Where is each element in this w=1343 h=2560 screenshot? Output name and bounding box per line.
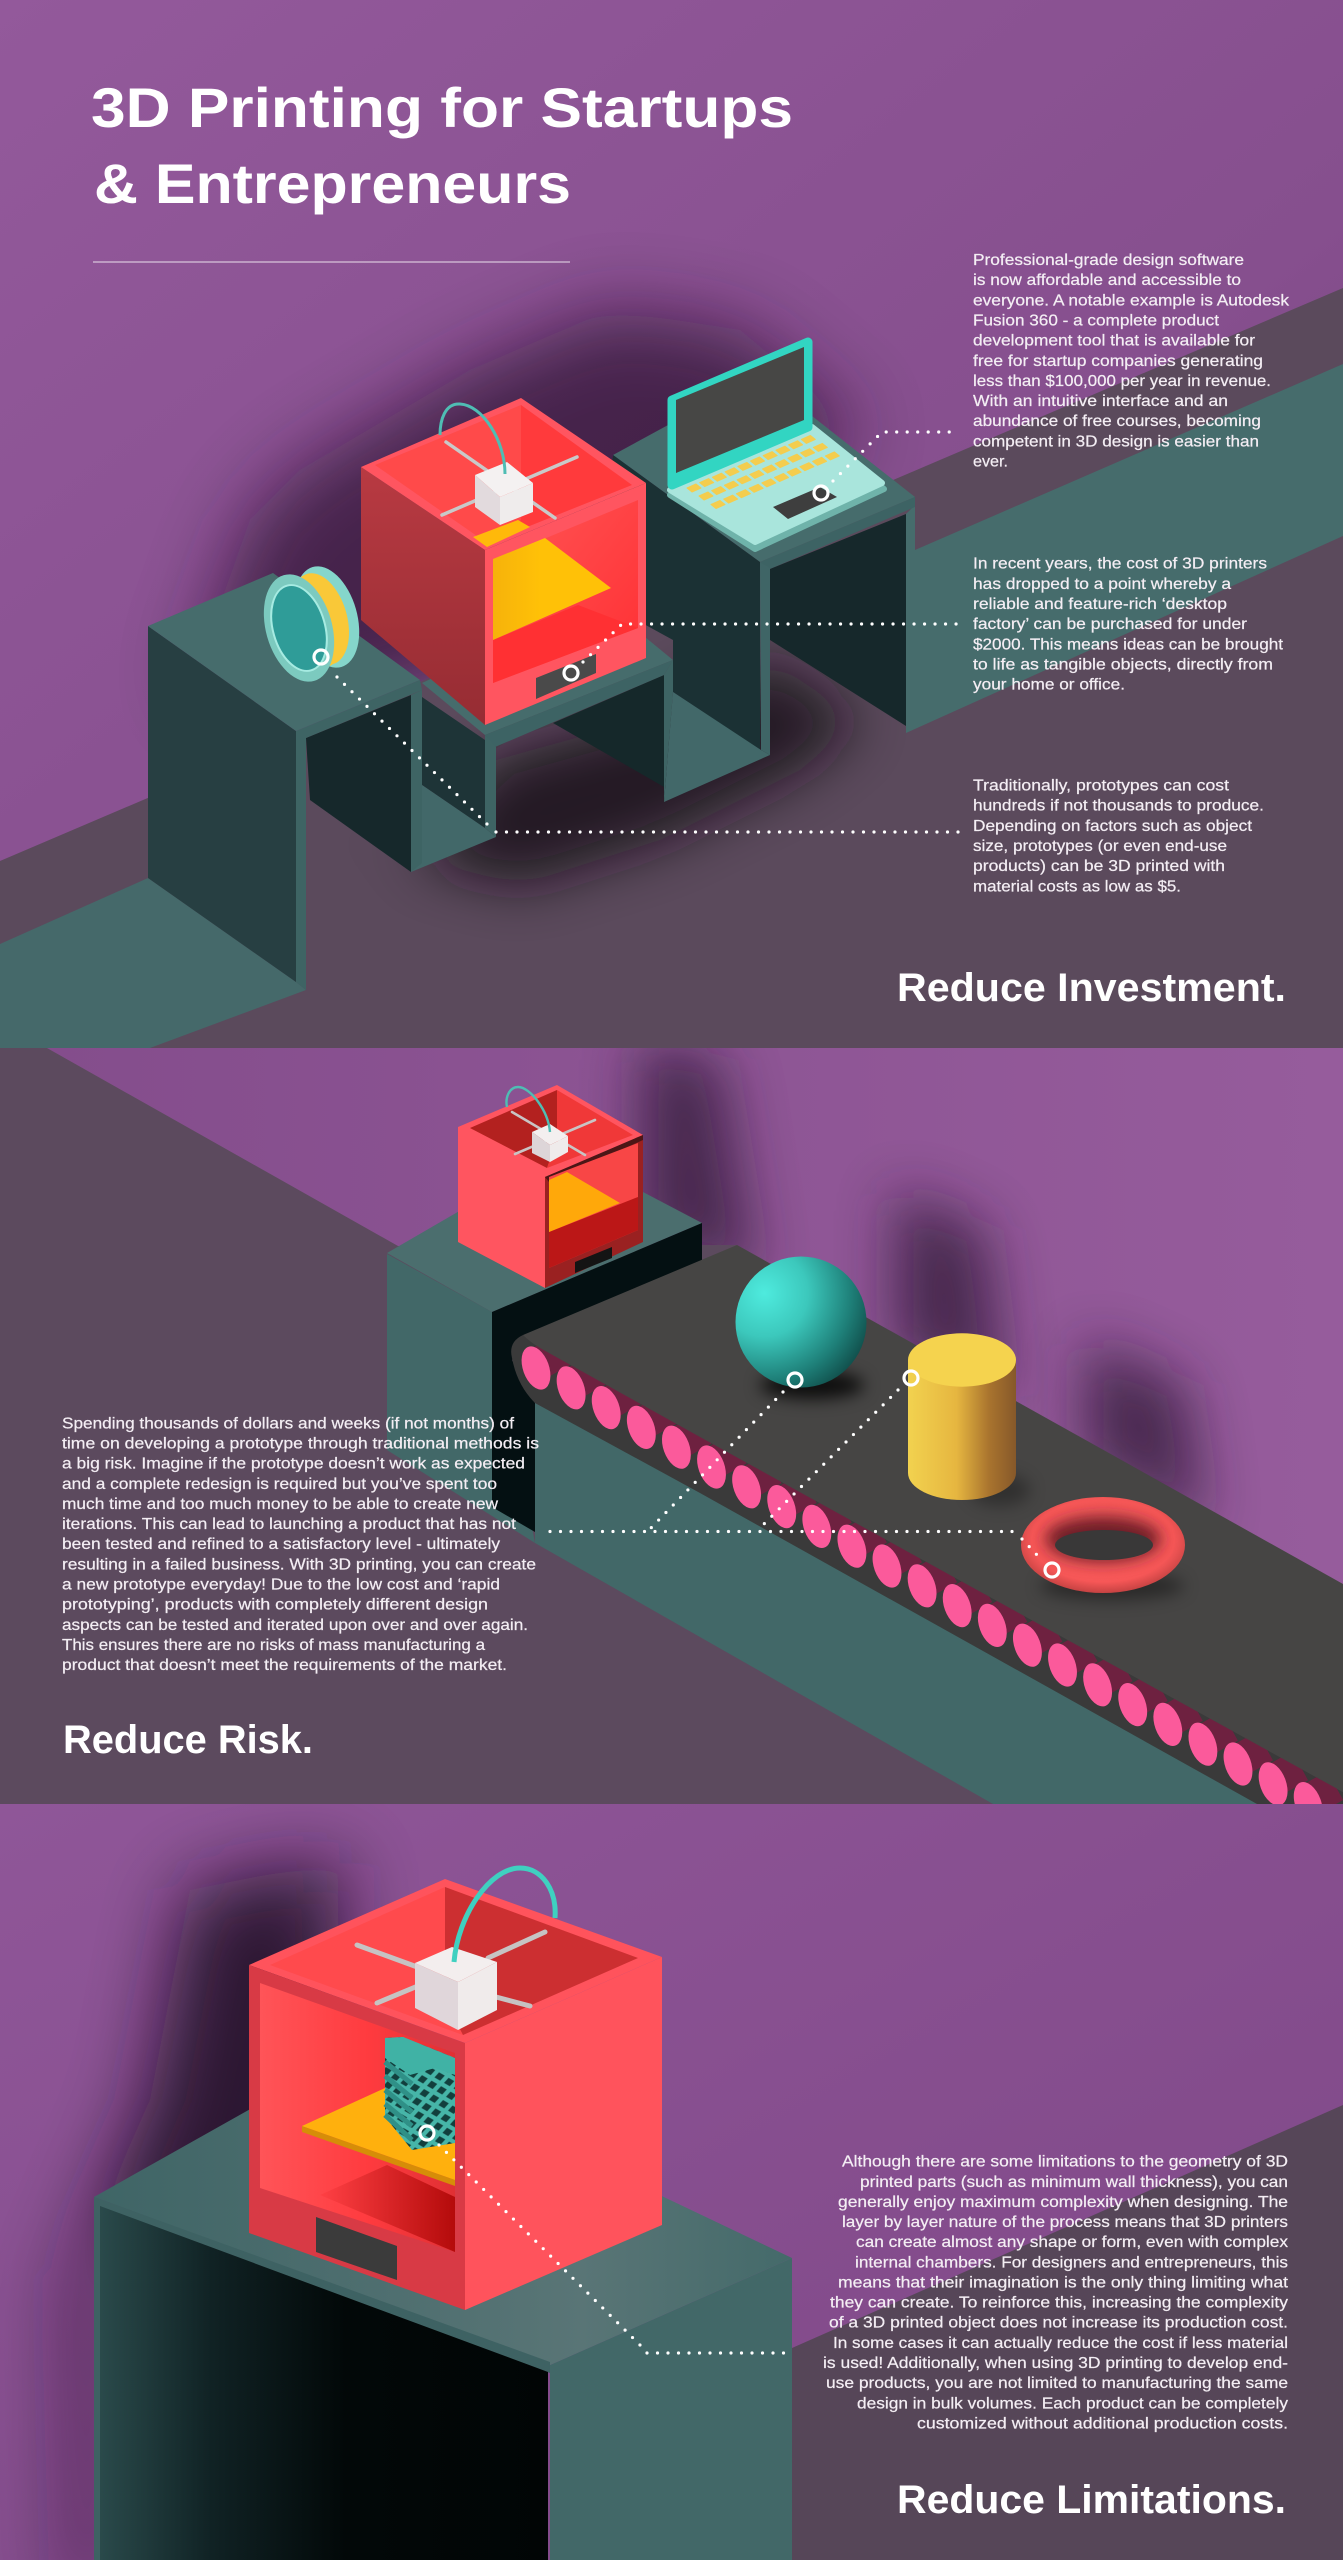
callout: cylinder	[757, 1390, 898, 1531]
filament	[506, 1087, 550, 1132]
text block: limitations: Although there are some limitations to the geometry of 3D	[842, 2154, 1288, 2171]
text block: design software: With an intuitive interface and an	[973, 393, 1228, 410]
left table side	[148, 626, 296, 982]
post one	[411, 690, 422, 872]
lattice left bands	[385, 2062, 412, 2140]
text block: risk: Spending thousands of dollars and weeks (if not months) of	[62, 1415, 515, 1432]
text block: printer cost: In recent years, the cost of 3D printers	[973, 556, 1267, 573]
printer top rim	[361, 398, 646, 550]
pedestal front	[492, 1223, 702, 1532]
pedestal block	[387, 1170, 702, 1543]
text block: printer cost: your home or office.	[973, 677, 1125, 694]
callout lines	[550, 1371, 1059, 1577]
marker: cylinder	[904, 1371, 918, 1385]
print head	[415, 1947, 497, 2030]
filament	[454, 1868, 555, 1962]
printer opening	[549, 1143, 638, 1268]
printer rods	[442, 442, 577, 518]
callout: torus	[1022, 1539, 1038, 1556]
print head	[532, 1124, 568, 1162]
text block: printer cost: reliable and feature-rich ‘desktop	[973, 596, 1227, 613]
text block: risk: a new prototype everyday! Due to the low cost and ‘rapid	[62, 1576, 500, 1594]
display	[575, 1247, 612, 1273]
marker: printed part	[420, 2126, 434, 2140]
printer top outer	[249, 1879, 662, 2043]
shelf inner wall	[553, 675, 664, 787]
text block: risk: prototyping’, products with completely different design	[62, 1597, 488, 1614]
chamber floor	[549, 1197, 638, 1268]
left table lip	[296, 680, 422, 990]
text block: limitations: customized without additional production costs.	[917, 2415, 1288, 2432]
interior right wall	[445, 1887, 638, 2035]
printer interior right	[547, 1090, 633, 1168]
text block: printer cost	[973, 556, 1284, 694]
pedestal opening	[100, 2206, 548, 2560]
print head	[475, 462, 533, 525]
rollers	[516, 1342, 1335, 1829]
pedestal edge	[94, 2197, 100, 2560]
callout: main horizontal	[550, 1530, 1013, 1533]
conveyor side	[535, 1403, 1343, 1804]
keyboard	[687, 435, 839, 508]
text block: risk: a big risk. Imagine if the prototype doesn’t work as expected	[62, 1456, 525, 1473]
text block: limitations: generally enjoy maximum complexity when designing. The	[838, 2194, 1288, 2211]
printer front	[485, 483, 646, 725]
floor background	[0, 1048, 1343, 1804]
text block: printer cost: to life as tangible objects, directly from	[973, 656, 1273, 673]
printer chamber floor	[493, 605, 638, 683]
chamber opening	[260, 1983, 455, 2252]
printer right face	[465, 1957, 662, 2310]
text block: limitations: design in bulk volumes. Each product can be completely	[857, 2395, 1288, 2412]
icon: laptop	[670, 342, 884, 549]
text block: design software: everyone. A notable example is Autodesk	[973, 292, 1290, 309]
title	[91, 76, 793, 215]
floor	[792, 2105, 1343, 2560]
text block: design software: less than $100,000 per year in revenue.	[973, 373, 1271, 390]
belt edge	[511, 1335, 1343, 1852]
text block: risk: resulting in a failed business. With 3D printing, you can create	[62, 1556, 536, 1573]
conveyor	[511, 1245, 1343, 1852]
right table back face	[600, 455, 760, 750]
pedestal top	[94, 2050, 792, 2365]
text block: limitations: of a 3D printed object does not increase its production cost.	[829, 2315, 1288, 2332]
printer front left	[249, 1965, 465, 2310]
spool filament	[267, 566, 359, 678]
chamber floor	[320, 2165, 455, 2252]
text block: risk: aspects can be tested and iterated upon over and over again.	[62, 1617, 528, 1634]
print bed	[549, 1172, 620, 1232]
left table inner wall	[306, 695, 411, 872]
laptop screen	[676, 347, 804, 473]
pedestal right face	[550, 2258, 792, 2560]
laptop screen frame	[672, 342, 808, 485]
shelf floor	[664, 692, 770, 802]
pedestal side	[387, 1254, 535, 1543]
bed edge	[302, 2126, 455, 2186]
text block: design software: development tool that is available for	[973, 333, 1256, 350]
rods	[357, 1932, 545, 2006]
text block: design software: Professional-grade design software	[973, 252, 1244, 269]
text block: prototype cost: Traditionally, prototypes can cost	[973, 778, 1230, 794]
text block: prototype cost: hundreds if not thousands to produce.	[973, 798, 1264, 815]
marker: sphere	[788, 1373, 802, 1387]
text block: design software: free for startup companies generating	[973, 353, 1263, 370]
text block: risk: product that doesn’t meet the requirements of the market.	[62, 1657, 507, 1674]
second bay wall	[422, 697, 485, 828]
printer front	[545, 1135, 643, 1288]
left table top	[148, 573, 420, 731]
right table lip	[760, 497, 915, 569]
print bed	[302, 2088, 455, 2180]
spool back flange	[284, 559, 370, 675]
middle shelf	[422, 638, 770, 802]
laptop base edge	[670, 432, 884, 549]
text block: risk: much time and too much money to be able to create new	[62, 1496, 498, 1513]
interior left wall	[270, 1887, 463, 2035]
floor	[0, 288, 1343, 1048]
printer frame edge	[545, 1135, 643, 1182]
floor shadow	[310, 660, 860, 885]
text block: printer cost: factory’ can be purchased for under	[973, 616, 1248, 633]
text block: limitations: can create almost any shape or form, even with complex	[856, 2234, 1288, 2251]
callout: printer	[583, 624, 959, 662]
marker: printer	[564, 666, 578, 680]
shelf post	[664, 660, 673, 802]
printer interior left	[470, 1090, 557, 1168]
wall shadows	[640, 1040, 1205, 1530]
floor strip right	[906, 364, 1343, 733]
shelf lip	[485, 660, 673, 747]
icon: filament spool	[252, 559, 370, 690]
display	[316, 2217, 397, 2280]
callout line	[420, 2126, 786, 2353]
post two	[485, 735, 496, 837]
callout: laptop	[833, 432, 959, 481]
right table post	[760, 562, 770, 755]
text block: printer cost: $2000. This means ideas can be brought	[973, 636, 1284, 653]
text block: risk: and a complete redesign is required but you’ve spent too	[62, 1476, 497, 1493]
text block: design software: Fusion 360 - a complete product	[973, 312, 1220, 329]
pedestal lip	[94, 2197, 550, 2373]
heading: reduce risk: Reduce Risk.	[63, 1718, 313, 1762]
printer interior left wall	[375, 405, 521, 543]
panel: reduce investment	[0, 0, 1343, 1048]
icon: cylinder	[908, 1333, 1016, 1500]
text block: design software: abundance of free courses, becoming	[973, 413, 1261, 430]
printer display	[536, 654, 596, 699]
text block: design software	[973, 252, 1290, 470]
wall shadow	[190, 310, 860, 720]
bed glimpse	[473, 520, 530, 547]
text block: prototype cost	[973, 778, 1264, 895]
heading: reduce investment: Reduce Investment.	[897, 966, 1286, 1010]
text block: limitations: layer by layer nature of the process means that 3D printers	[842, 2214, 1288, 2231]
wall background	[0, 0, 1343, 861]
callout: sphere	[648, 1392, 783, 1531]
marker: spool	[314, 650, 328, 664]
text block: prototype cost: size, prototypes (or even end-use	[973, 838, 1227, 855]
text block: limitations	[823, 2154, 1289, 2432]
text block: risk: time on developing a prototype through traditional methods is	[62, 1435, 539, 1452]
right table	[610, 416, 915, 755]
right table inner wall	[770, 514, 906, 726]
text block: design software: is now affordable and accessible to	[973, 272, 1241, 289]
panel: reduce risk	[0, 1040, 1343, 1852]
filament	[440, 404, 505, 474]
text block: limitations: use products, you are not limited to manufacturing the same	[826, 2375, 1288, 2392]
pedestal top	[387, 1170, 702, 1312]
text block: risk: This ensures there are no risks of mass manufacturing a	[62, 1637, 485, 1654]
icon: large printer	[249, 1868, 662, 2310]
laptop base	[670, 427, 882, 542]
lattice top	[385, 2037, 455, 2075]
text block: limitations: internal chambers. For designers and entrepreneurs, this	[855, 2254, 1288, 2271]
icon: 3d printer	[361, 398, 646, 725]
text block: risk: been tested and refined to a satisfactory level - ultimately	[62, 1536, 500, 1553]
printer left face	[458, 1085, 643, 1288]
wall	[47, 1048, 1343, 1600]
icon: small printer	[458, 1085, 643, 1288]
text block: risk: iterations. This can lead to launching a product that has not	[62, 1516, 517, 1533]
trackpad	[773, 487, 837, 519]
floor strip left	[0, 878, 306, 1048]
text block: prototype cost: Depending on factors such as object	[973, 818, 1253, 835]
rods	[512, 1112, 595, 1155]
text block: printer cost: has dropped to a point whereby a	[973, 576, 1231, 593]
shelf top	[422, 638, 673, 735]
text block: limitations: is used! Additionally, when using 3D printing to develop end-	[823, 2355, 1288, 2372]
printer opening	[493, 500, 638, 683]
printer interior right wall	[487, 405, 632, 543]
panel: reduce limitations	[0, 1804, 1343, 2560]
left table	[148, 573, 496, 990]
second bay floor	[411, 785, 496, 872]
spool front flange	[252, 566, 346, 690]
text block: limitations: means that their imagination is the only thing limiting what	[838, 2274, 1289, 2291]
marker: laptop	[814, 486, 828, 500]
object shadows	[760, 1371, 1184, 1600]
wall	[0, 1804, 1343, 2560]
text block: prototype cost: products) can be 3D printed with	[973, 858, 1225, 875]
text block: prototype cost: material costs as low as $5.	[973, 878, 1181, 895]
text block: risk	[62, 1415, 539, 1674]
text block: design software: ever.	[973, 454, 1008, 470]
text block: limitations: they can create. To reinforce this, increasing the complexity	[830, 2295, 1288, 2312]
printer side	[361, 467, 485, 725]
heading: reduce limitations: Reduce Limitations.	[897, 2478, 1286, 2522]
title: 3D Printing for Startups	[91, 76, 793, 139]
callout lines	[314, 432, 959, 832]
right table top	[613, 416, 915, 562]
text block: limitations: printed parts (such as minimum wall thickness), you can	[860, 2174, 1288, 2191]
belt top	[523, 1245, 1343, 1792]
pedestal block	[94, 2050, 792, 2560]
print bed	[493, 538, 611, 640]
icon: sphere	[736, 1256, 866, 1388]
title: & Entrepreneurs	[94, 152, 571, 215]
text block: design software: competent in 3D design is easier than	[973, 433, 1259, 450]
wall shadow	[70, 1860, 340, 2560]
callout: spool	[337, 677, 959, 832]
text block: limitations: In some cases it can actually reduce the cost if less material	[833, 2335, 1288, 2352]
spool centre	[262, 579, 336, 677]
icon: torus	[1021, 1497, 1185, 1593]
marker: torus	[1045, 1563, 1059, 1577]
lattice object	[385, 2037, 455, 2150]
